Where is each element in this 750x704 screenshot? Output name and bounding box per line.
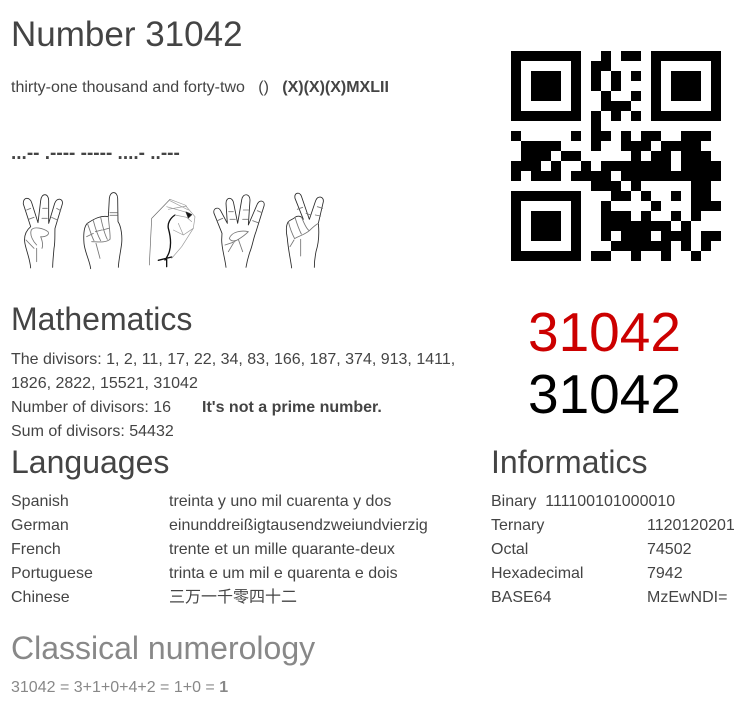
icon: hand sign 0: [149, 199, 195, 267]
informatics table: Hexadecimal: [491, 565, 583, 582]
numerology calculation: 31042 = 3+1+0+4+2 = 1+0 = 1: [11, 679, 228, 696]
languages table: treinta y uno mil cuarenta y dos: [169, 493, 391, 510]
informatics table: MzEwNDI=: [647, 589, 727, 606]
heading: informatics: Informatics: [491, 444, 647, 480]
informatics table: Octal: [491, 541, 528, 558]
languages table: Chinese: [11, 589, 70, 606]
divisors list: [11, 351, 455, 392]
languages table: einunddreißigtausendzweiundvierzig: [169, 517, 428, 534]
languages table: [11, 493, 428, 606]
sum of divisors: Sum of divisors: 54432: [11, 423, 174, 440]
heading: languages: Languages: [11, 444, 169, 480]
icon: hand sign 2: [286, 193, 323, 268]
divisors list: The divisors: 1, 2, 11, 17, 22, 34, 83, 166, 187, 374, 913, 1411,: [11, 351, 455, 368]
number of divisors: Number of divisors: 16: [11, 399, 171, 416]
informatics table: Binary 111100101000010: [491, 493, 675, 510]
languages table: Spanish: [11, 493, 69, 510]
QR code: [511, 51, 721, 261]
sign language hands: [22, 192, 324, 270]
big number in red: 31042: [528, 301, 681, 363]
languages table: French: [11, 541, 61, 558]
languages table: Portuguese: [11, 565, 93, 582]
divisors text block: [11, 351, 455, 440]
title: Number 31042: [11, 15, 243, 54]
informatics table: 1120120201: [647, 517, 735, 534]
heading: mathematics: Mathematics: [11, 301, 192, 337]
languages table: 三万一千零四十二: [169, 589, 297, 606]
number in words and roman numeral: thirty-one thousand and forty-two () (X)(X)(X)MXLII: [11, 79, 389, 96]
divisors list: 1826, 2822, 15521, 31042: [11, 375, 198, 392]
icon: hand sign 4: [214, 195, 264, 267]
icon: hand sign 1: [84, 193, 122, 269]
informatics table: Ternary: [491, 517, 544, 534]
informatics table: 74502: [647, 541, 692, 558]
morse code: ...-- .---- ----- ....- ..---: [11, 143, 180, 164]
languages table: German: [11, 517, 69, 534]
languages table: trinta e um mil e quarenta e dois: [169, 565, 398, 582]
prime statement: It's not a prime number.: [202, 399, 382, 416]
big number in black: 31042: [528, 363, 681, 425]
informatics table: 7942: [647, 565, 683, 582]
informatics table: BASE64: [491, 589, 551, 606]
languages table: trente et un mille quarante-deux: [169, 541, 395, 558]
informatics table: [491, 493, 735, 606]
icon: hand sign 3: [23, 195, 62, 268]
heading: classical numerology: Classical numerology: [11, 630, 315, 666]
